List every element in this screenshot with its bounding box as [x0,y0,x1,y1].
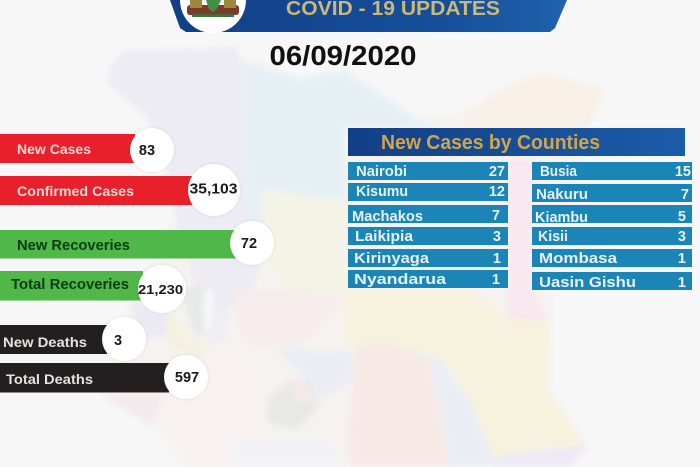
row: Laikipia: Laikipia [355,229,414,245]
row: Mombasa: Mombasa [539,251,618,267]
row: Uasin Gishu: 1 [678,275,686,291]
table heading [348,128,685,156]
stat: new recoveries [0,221,274,265]
row: Nakuru [532,184,692,203]
stat: total deaths: Total Deaths [6,371,93,387]
stat: total recoveries: Total Recoveries [11,277,129,293]
row: Mombasa: 1 [678,251,686,267]
row: Nairobi: Nairobi [356,164,407,180]
row: Nyandarua: Nyandarua [354,272,447,288]
row: Nairobi [348,162,508,180]
stat: new deaths [0,317,146,361]
row: Busia: Busia [540,164,578,180]
row: Busia [532,162,692,180]
header banner [170,0,567,33]
row: Machakos: Machakos [352,209,423,225]
stat: new cases [0,128,174,172]
stat: total deaths [0,355,208,399]
stat: total deaths: 597 [175,370,199,386]
stat: confirmed cases [0,164,240,216]
row: Nakuru: 7 [681,187,689,203]
row: Nairobi: 27 [489,164,505,180]
row: Kisii: Kisii [538,229,568,245]
row: Machakos [348,205,508,225]
emblem: coat of arms [180,0,246,33]
row: Uasin Gishu [532,272,692,291]
row: Kisii: 3 [678,229,686,245]
row: Laikipia: 3 [493,229,501,245]
row: Kisii [532,227,692,245]
row: Kiambu [532,205,692,226]
row: Nyandarua [348,270,508,288]
stat: new recoveries: New Recoveries [17,238,130,254]
row: Laikipia [348,227,508,245]
row: Kisumu: Kisumu [356,184,408,200]
date: 06/09/2020 [270,40,416,71]
row: Kisumu: 12 [489,184,505,200]
row: Kirinyaga [348,249,508,267]
row: Nakuru: Nakuru [536,187,588,203]
row: Mombasa [532,249,692,267]
row: Kirinyaga: 1 [493,251,501,267]
stat: new deaths: New Deaths [3,334,87,350]
stat: new recoveries: 72 [241,236,257,252]
stat: total recoveries [0,265,186,313]
stat: new cases: New Cases [17,141,91,157]
row: Kirinyaga: Kirinyaga [354,251,430,267]
panel: new cases by counties [348,128,692,291]
stat: confirmed cases: Confirmed Cases [17,183,134,199]
stat: new deaths: 3 [114,333,122,349]
row: Kiambu: Kiambu [535,210,588,226]
row: Kisumu [348,183,508,201]
stat: new cases: 83 [139,143,155,159]
stat: total recoveries: 21,230 [138,282,183,297]
stat: confirmed cases: 35,103 [190,182,238,198]
row: Uasin Gishu: Uasin Gishu [539,275,636,291]
map: faint Kenya counties [100,48,605,467]
row: Kiambu: 5 [678,209,686,225]
table heading: New Cases by Counties [381,132,600,154]
row: Busia: 15 [675,164,691,180]
row: Nyandarua: 1 [492,272,500,288]
row: Machakos: 7 [492,208,500,224]
